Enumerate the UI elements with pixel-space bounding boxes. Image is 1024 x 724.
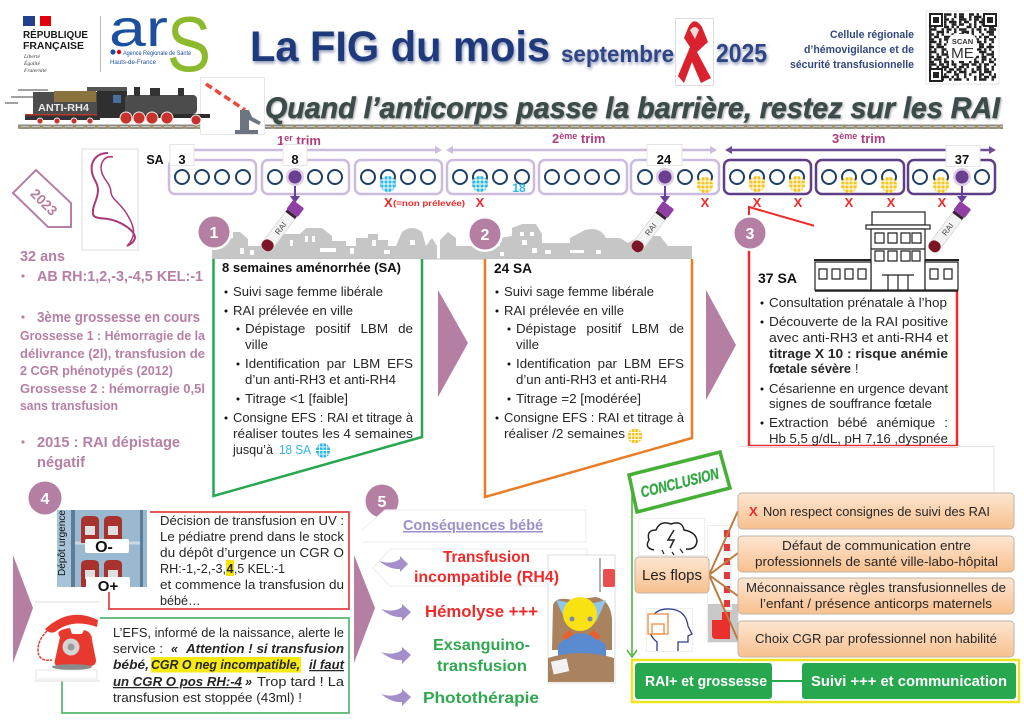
- patient history: [20, 248, 206, 471]
- text: cellule régionale: sécurité transfusionnelle: [790, 59, 914, 71]
- step 5 badge: 5: [378, 494, 387, 511]
- title: 2025: [716, 38, 767, 68]
- trimester 1 arrow: 1: [277, 133, 284, 148]
- item: photothérapie: Photothérapie: [423, 690, 539, 707]
- item: transfusion incompatible: Transfusion: [443, 549, 530, 566]
- bullet list: Dépistage positif LBM de: [245, 322, 413, 336]
- box: choix CGR: Choix CGR par professionnel non habilité: [755, 632, 997, 646]
- bullet list: jusqu’à: [232, 443, 273, 457]
- box: les flops: [635, 557, 709, 593]
- bullet list: ville: [245, 338, 268, 352]
- text: et commence la transfusion du: [160, 578, 344, 592]
- SA week labels: 8: [291, 152, 299, 167]
- SA week labels: SA: [146, 153, 164, 167]
- SA week labels: 3: [178, 152, 186, 167]
- QR code: SCAN: [952, 37, 973, 46]
- logo: ARS Hauts-de-France: Hauts-de-France: [110, 60, 157, 66]
- bullet list: Découverte de la RAI positive: [769, 315, 948, 329]
- box: méconnaissance: [738, 578, 1014, 614]
- bullet list: !: [855, 362, 858, 376]
- bullet list: [496, 285, 684, 441]
- text: Décision de transfusion en UV :: [160, 514, 344, 528]
- step 1 badge: 1: [210, 225, 219, 242]
- bullet list: Titrage =2 [modérée]: [516, 392, 641, 406]
- SA week labels: 24: [657, 152, 672, 167]
- text: CGR O neg incompatible,: [151, 658, 300, 672]
- bullet list: Extraction bébé anémique :: [769, 416, 948, 430]
- missed samples: X: [887, 195, 896, 210]
- step 2 badge: [467, 216, 503, 252]
- box: non respect: [738, 493, 1014, 529]
- bullet list: Consultation prénatale à l’hop: [769, 296, 947, 310]
- box: suivi et communication: Suivi +++ et communication: [811, 674, 1007, 690]
- arrow: into step 4: [13, 555, 33, 663]
- trimester 3 arrow: trim: [857, 131, 885, 146]
- bullet list: Identification par LBM EFS: [516, 357, 684, 371]
- SA week labels: [146, 144, 980, 167]
- connector lines: [709, 511, 738, 640]
- box: suivi et communication: [802, 663, 1016, 699]
- tag 2023: 2023: [27, 185, 61, 219]
- bullet list: réaliser /2 semaines: [504, 427, 625, 441]
- blood tube 3: [926, 201, 971, 255]
- item: exsanguino-transfusion: transfusion: [437, 658, 527, 675]
- bullet list: RAI prélevée en ville: [233, 304, 353, 318]
- text: »: [245, 675, 252, 689]
- box: défaut de communication: professionnels de santé ville-labo-hôpital: [755, 555, 998, 569]
- bullet list: ville: [516, 338, 539, 352]
- train ANTI-RH4: ANTI-RH4: [38, 102, 89, 114]
- text: cellule régionale: [790, 29, 914, 71]
- image: emergency blood depot: O-: [95, 539, 113, 556]
- bullet list: fœtale sévère: [769, 362, 851, 376]
- image: sick baby: [548, 555, 615, 683]
- text: cellule régionale: Cellule régionale: [830, 29, 914, 41]
- box: choix CGR: [738, 621, 1014, 657]
- barrier: [200, 78, 264, 134]
- bullet list: réaliser toutes les 4 semaines: [233, 427, 413, 441]
- panel 1: 8 SA: [214, 259, 422, 496]
- tag 2023: [13, 170, 71, 227]
- icon: head with memory card: [646, 608, 692, 652]
- logo: ARS Hauts-de-France: Agence Régionale de Santé: [123, 50, 191, 57]
- image: emergency blood depot: [56, 510, 147, 595]
- box: RAI+ et grossesse: RAI+ et grossesse: [645, 674, 767, 690]
- panel 4b: EFS alert: [62, 618, 349, 713]
- text: «: [171, 642, 178, 656]
- heading: 8 semaines aménorrhée (SA): [222, 260, 401, 275]
- subtitle: Quand l’anticorps passe la barrière, restez sur les RAI: [265, 92, 1001, 125]
- box: les flops: Les flops: [642, 567, 702, 584]
- text: L’EFS, informé de la naissance, alerte le: [113, 626, 344, 640]
- logo: République Française: FRANÇAISE: [23, 40, 84, 52]
- box: méconnaissance: Méconnaissance règles transfusionnelles de: [746, 581, 1006, 595]
- trimester 1 arrow: [170, 133, 442, 154]
- blood tube 2: [629, 201, 674, 255]
- logo: République Française: Fraternité: [23, 68, 47, 74]
- blood tube 3: RAI: [940, 221, 956, 238]
- text: bébé,: [113, 658, 149, 672]
- stamp: [629, 452, 730, 512]
- conclusion block: [627, 446, 1019, 702]
- panel 5: consequences: [362, 510, 615, 707]
- box: non respect: X: [749, 504, 758, 519]
- week circles: [175, 170, 989, 184]
- panel 4a: transfusion decision: [109, 512, 349, 609]
- step 3 badge: 3: [746, 226, 755, 243]
- patient history: Grossesse 2 : hémorragie 0,5l: [20, 382, 205, 396]
- background chevron shapes: [362, 510, 587, 586]
- bullet list: Identification par LBM EFS: [245, 357, 413, 371]
- text: un CGR O pos RH:-4: [113, 675, 242, 689]
- trimester 2 arrow: 2: [552, 131, 559, 146]
- week boxes: [169, 160, 995, 194]
- QR code: ME: [951, 45, 974, 62]
- item: transfusion incompatible: incompatible (RH4): [414, 569, 559, 586]
- missed samples: X: [384, 195, 393, 210]
- trimester 3 arrow: 3: [832, 131, 839, 146]
- image: emergency blood depot: Dépôt urgence: [56, 510, 68, 576]
- bullet list: Césarienne en urgence devant: [769, 382, 949, 396]
- patient history: sans transfusion: [20, 399, 118, 413]
- item: hémolyse: Hémolyse +++: [425, 603, 538, 621]
- heading: 37 SA: [758, 271, 797, 286]
- text: [160, 514, 345, 608]
- patient history: Grossesse 1 : Hémorragie de la: [20, 329, 206, 343]
- patient history: délivrance (2l), transfusion de: [20, 347, 205, 361]
- bullet list: Consigne EFS : RAI et titrage à: [504, 411, 684, 425]
- blood tube 1: [259, 200, 304, 254]
- blood tube 2: RAI: [643, 221, 659, 238]
- heading: 24 SA: [494, 261, 532, 276]
- icon: red ribbon: [676, 18, 714, 86]
- patient history: 3ème grossesse en cours: [37, 310, 200, 326]
- railway track: [18, 126, 1003, 128]
- bullet list: [760, 296, 949, 446]
- missed samples: (=non prélevée): [393, 198, 465, 208]
- text: [113, 626, 345, 705]
- box: défaut de communication: Défaut de communication entre: [782, 539, 971, 553]
- bullet list: Titrage <1 [faible]: [245, 392, 348, 406]
- logo: République Française: [23, 16, 101, 74]
- stamp: CONCLUSION: [639, 465, 721, 501]
- trimester 3 arrow: [725, 131, 996, 154]
- image: emergency blood depot: O+: [98, 578, 118, 595]
- missed samples: X: [753, 195, 762, 210]
- bullet list: RAI prélevée en ville: [504, 304, 624, 318]
- box: RAI+ et grossesse: [635, 663, 772, 699]
- bullet list: titrage X 10 : risque anémie: [769, 347, 948, 361]
- logo: ARS Hauts-de-France: S: [167, 0, 211, 88]
- missed samples: X: [794, 195, 803, 210]
- blue and yellow markers: [380, 176, 949, 195]
- SA week labels: 37: [955, 152, 969, 167]
- step 1 badge: [196, 214, 232, 250]
- logo: ARS Hauts-de-France: ar: [109, 0, 168, 58]
- icon: hospital: [814, 210, 960, 291]
- patient history: AB RH:1,2,-3,-4,5 KEL:-1: [37, 269, 203, 285]
- bullet list: Dépistage positif LBM de: [516, 322, 684, 336]
- bullet list: Suivi sage femme libérale: [504, 285, 654, 299]
- key message: [632, 660, 1019, 702]
- patient history: 2015 : RAI dépistage: [37, 434, 180, 451]
- item: exsanguino-transfusion: Exsanguino-: [433, 637, 530, 654]
- box: non respect: Non respect consignes de suivi des RAI: [763, 505, 990, 519]
- patient history: 32 ans: [20, 248, 65, 265]
- text: transfusion est stoppée (43ml) !: [113, 691, 302, 705]
- bullet list: Consigne EFS : RAI et titrage à: [233, 411, 413, 425]
- city skyline 1: [212, 228, 440, 259]
- arrow: into step 5: [354, 555, 375, 663]
- text: ,5 KEL:-1: [234, 562, 285, 576]
- text: Trop tard ! La: [257, 675, 344, 689]
- panel 3: 37 SA: [749, 218, 957, 446]
- text: cellule régionale: d’hémovigilance et de: [804, 44, 914, 56]
- trimester 2 arrow: [446, 131, 717, 154]
- patient history: 2 CGR phénotypés (2012): [20, 364, 173, 378]
- trimester 1 arrow: trim: [293, 133, 321, 148]
- text: bébé…: [160, 594, 201, 608]
- patient history: négatif: [37, 454, 86, 471]
- bullet list: Suivi sage femme libérale: [233, 285, 383, 299]
- step 3 badge: [732, 215, 768, 251]
- text: RH:-1,-2,-3,: [160, 562, 226, 576]
- step 5 badge: [363, 482, 401, 520]
- item: transfusion incompatible: [414, 549, 559, 586]
- bullet list: d’un anti-RH3 et anti-RH4: [516, 373, 667, 387]
- blue and yellow markers: 18: [512, 181, 526, 195]
- bullet list: signes de souffrance fœtale: [769, 397, 932, 411]
- item: exsanguino-transfusion: [433, 637, 530, 675]
- arrows: [379, 556, 411, 706]
- timeline: [146, 131, 996, 210]
- sampling points: [286, 168, 971, 203]
- icon: pregnant woman: [82, 149, 138, 250]
- trimester 2 arrow: ème: [559, 131, 577, 141]
- box: méconnaissance: l’enfant / présence anticorps maternels: [760, 597, 992, 611]
- trimester 3 arrow: ème: [839, 131, 857, 141]
- text: Attention ! si transfusion: [185, 642, 344, 656]
- logo: République Française: Liberté: [23, 54, 40, 60]
- bullet list: 18 SA: [279, 443, 312, 457]
- missed samples: X: [845, 195, 854, 210]
- panel 2: 24 SA: [485, 259, 692, 497]
- step 4 badge: [26, 479, 64, 517]
- arrow: step 1 to 2: [438, 290, 468, 397]
- missed samples: [384, 195, 947, 210]
- heading: Conséquences bébé: [403, 517, 543, 534]
- logo: République Française: RÉPUBLIQUE: [23, 28, 88, 41]
- bullet list: d’un anti-RH3 et anti-RH4: [245, 373, 396, 387]
- text: il faut: [309, 658, 345, 672]
- QR code: [926, 11, 999, 84]
- red arrow to step 3: [749, 207, 815, 226]
- arrow: step 2 to 3: [706, 290, 736, 400]
- blood tube 1: RAI: [273, 220, 289, 237]
- text: 4: [226, 562, 234, 576]
- bullet list: Hb 5,5 g/dL, pH 7,16 ,dyspnée: [769, 432, 948, 446]
- logo: ARS Hauts-de-France: [109, 0, 211, 88]
- text: Le pédiatre prend dans le stock: [160, 530, 345, 544]
- blank framed area: [738, 446, 994, 495]
- trimester 1 arrow: er: [284, 133, 293, 143]
- city skyline 2: [440, 224, 692, 259]
- missed samples: X: [476, 195, 485, 210]
- icon: storm cloud: [638, 518, 704, 556]
- bullet list: avec anti-RH3 et anti-RH4 et: [769, 331, 949, 345]
- missed samples: X: [701, 195, 710, 210]
- box: défaut de communication: [738, 536, 1014, 572]
- step 4 badge: 4: [41, 491, 50, 508]
- icon: barrier and thumb down: [708, 526, 738, 642]
- icon: red telephone: [33, 602, 100, 681]
- bullet list: [224, 285, 413, 457]
- train ANTI-RH4: [5, 87, 210, 125]
- step 2 badge: 2: [481, 227, 490, 244]
- title: [250, 23, 767, 71]
- green arrow down: [627, 487, 637, 657]
- text: du dépôt d’urgence un CGR O: [160, 546, 344, 560]
- title: La FIG du mois: [250, 23, 550, 71]
- title: septembre: [561, 41, 674, 67]
- missed samples: X: [938, 195, 947, 210]
- text: service :: [113, 642, 163, 656]
- logo: République Française: Égalité: [23, 59, 40, 67]
- trimester 2 arrow: trim: [577, 131, 605, 146]
